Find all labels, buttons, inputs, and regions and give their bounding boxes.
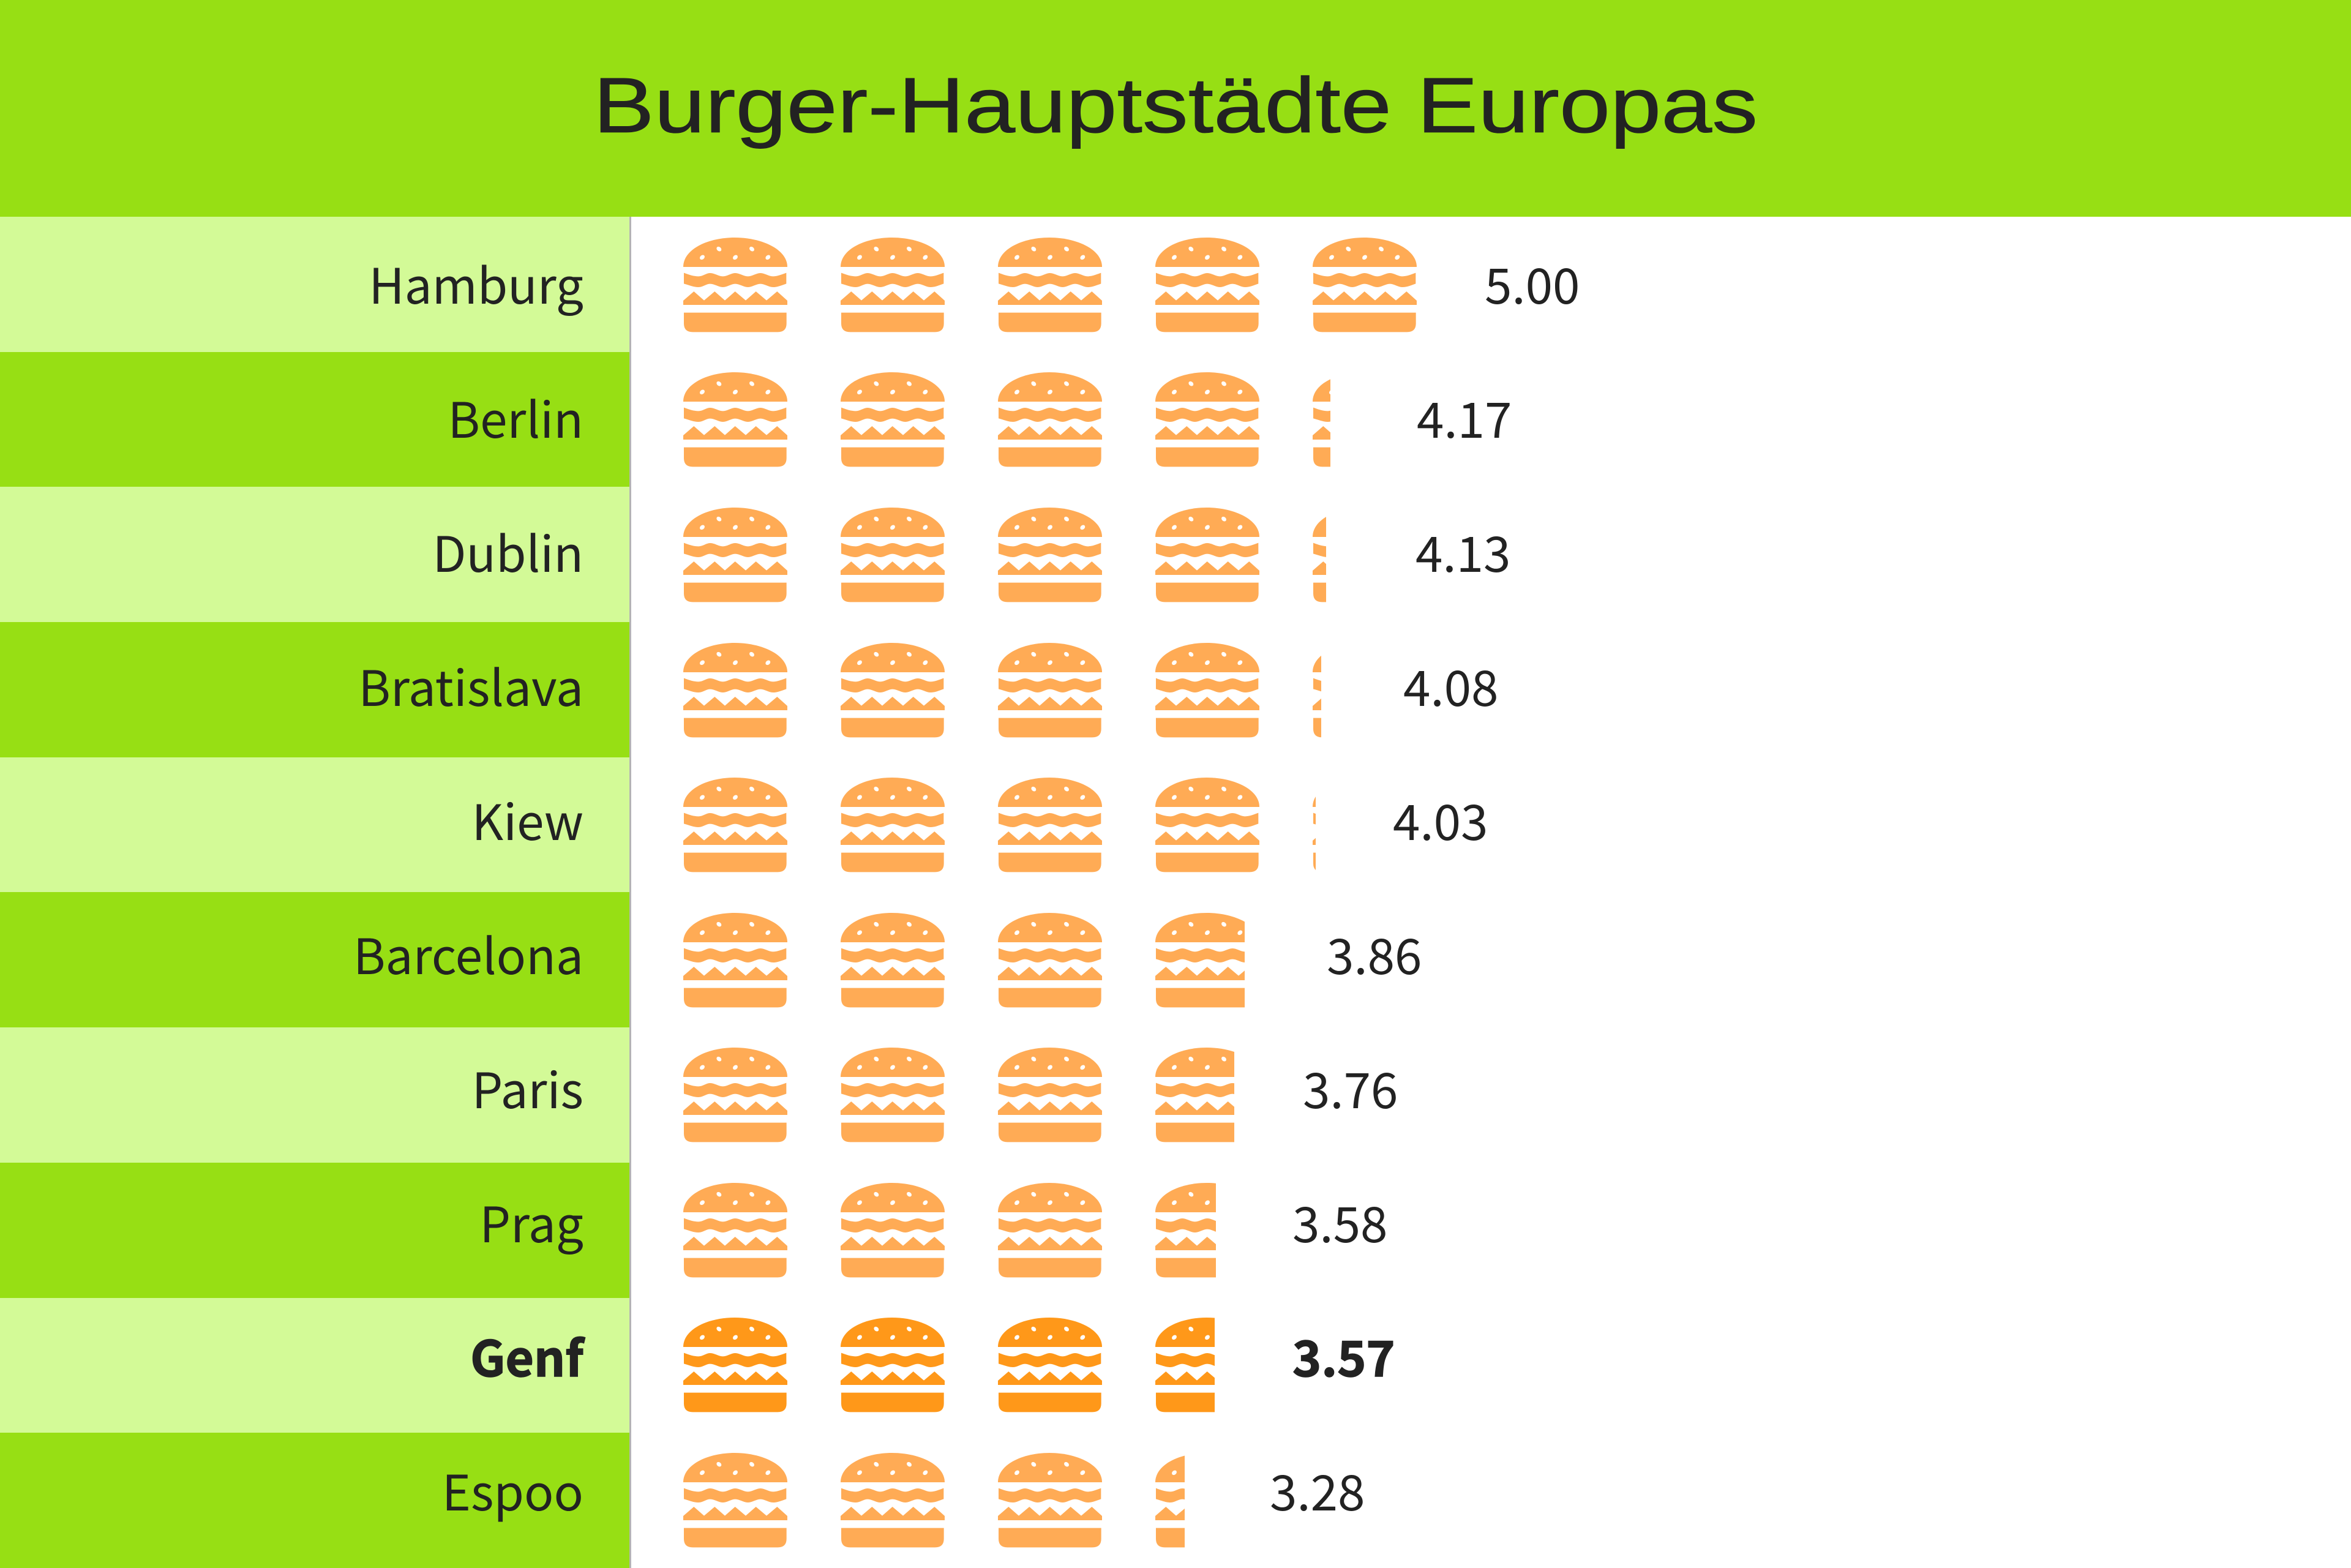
title: Burger-Hauptstädte Europas — [593, 62, 1758, 149]
row: Prag: 3.58 — [1292, 1186, 1387, 1257]
row: Paris: Paris — [472, 1052, 583, 1123]
row: Dublin: Dublin — [432, 516, 583, 587]
row: Hamburg: 5.00 — [1485, 247, 1580, 318]
row: Barcelona — [0, 892, 1422, 1027]
divider between labels and chart — [629, 217, 631, 1568]
row: Kiew: Kiew — [471, 784, 583, 855]
row: Dublin — [0, 487, 1510, 622]
title banner — [0, 0, 2351, 217]
row: Hamburg — [0, 217, 1580, 352]
row: Espoo: Espoo — [442, 1454, 583, 1525]
row: Prag: Prag — [479, 1186, 583, 1257]
row: Berlin: Berlin — [448, 381, 583, 452]
row: Dublin: 4.13 — [1415, 516, 1510, 587]
row: Kiew: 4.03 — [1393, 784, 1488, 855]
row: Bratislava — [0, 622, 1498, 757]
row: Prag — [0, 1163, 1387, 1298]
row: Barcelona: Barcelona — [353, 918, 583, 989]
row: Espoo: 3.28 — [1270, 1454, 1365, 1525]
row: Espoo — [0, 1433, 1365, 1568]
row: Genf (highlighted): Genf — [470, 1320, 585, 1391]
row: Kiew — [0, 757, 1488, 893]
row: Paris: 3.76 — [1303, 1052, 1398, 1123]
row: Paris — [0, 1027, 1398, 1163]
row: Genf (highlighted) — [0, 1298, 1395, 1433]
row: Bratislava: 4.08 — [1403, 650, 1498, 721]
row: Barcelona: 3.86 — [1327, 918, 1422, 989]
row: Bratislava: Bratislava — [358, 650, 583, 721]
row: Berlin — [0, 352, 1512, 487]
row: Berlin: 4.17 — [1417, 381, 1512, 452]
row: Hamburg: Hamburg — [369, 247, 583, 318]
row: Genf (highlighted): 3.57 — [1292, 1320, 1395, 1391]
